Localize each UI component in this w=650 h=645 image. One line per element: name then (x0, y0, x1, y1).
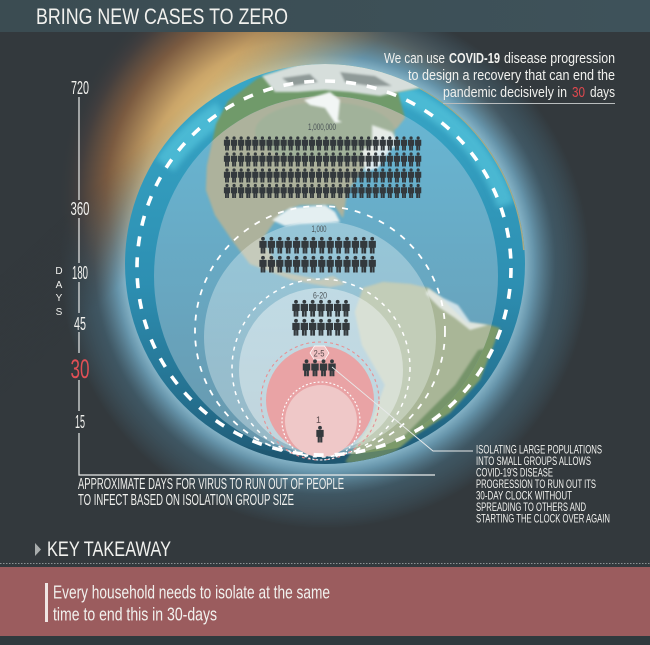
label: 1,000 (312, 224, 326, 234)
2-5 people group (303, 346, 336, 376)
axis tick labels: 360 (70, 199, 90, 219)
dotted outline (282, 382, 360, 460)
clouds north atlantic (362, 125, 400, 172)
axis title days: D (55, 266, 63, 277)
label: 1 (316, 415, 321, 425)
takeaway accent bar (45, 583, 48, 622)
callout text: 30-DAY CLOCK WITHOUT (476, 488, 572, 502)
hudson bay ice (304, 92, 342, 123)
dashed outline (232, 279, 410, 457)
axis title days (55, 266, 63, 318)
axis tick labels: 45 (74, 314, 86, 334)
takeaway band (0, 567, 650, 636)
circle: 6-20 group (232, 279, 410, 457)
intro text block: disease progression (504, 51, 615, 67)
big dashed route around globe (137, 81, 511, 455)
takeaway text: time to end this in 30-days (53, 604, 217, 624)
land tints inside inner circle (205, 96, 492, 454)
blue atmospheric glow (70, 32, 584, 523)
intro underline (443, 103, 615, 104)
axis tick labels: 180 (72, 263, 88, 283)
dotted divider (0, 562, 650, 564)
key takeaway heading: KEY TAKEAWAY (47, 538, 171, 561)
land: southern green edge (404, 348, 484, 436)
land: interior south america (349, 281, 492, 454)
callout text: COVID-19'S DISEASE (476, 466, 553, 480)
earth globe (125, 60, 525, 470)
axis tick labels: 30 (70, 354, 90, 384)
callout text (476, 442, 610, 526)
orange atmospheric glow (58, 0, 538, 435)
inner wash of ocean (154, 96, 498, 456)
bright coastal water (165, 84, 506, 205)
land: south america (344, 324, 501, 463)
land: interior north america (205, 96, 406, 288)
axis caption: APPROXIMATE DAYS FOR VIRUS TO RUN OUT OF PEOPLE (78, 476, 344, 493)
circle: 1 person (282, 382, 360, 460)
land fringe on north-east rim (420, 88, 524, 250)
intro text block: to design a recovery that can end the (408, 68, 615, 84)
hexagon label (310, 346, 329, 360)
intro text block: 30 (572, 85, 585, 101)
y axis and baseline (79, 97, 435, 475)
circle: 2-5 group (261, 342, 379, 460)
globe ocean (125, 64, 525, 464)
intro text block: COVID-19 (449, 51, 500, 67)
solid fill (204, 221, 436, 453)
axis tick labels (70, 78, 90, 432)
1,000,000 people group (224, 122, 421, 198)
dashed outline (195, 206, 445, 456)
header band (0, 0, 650, 32)
solid fill (266, 346, 374, 454)
axis tick labels: 15 (75, 412, 85, 432)
axis title days: S (56, 307, 63, 318)
solid fill (285, 385, 357, 457)
arctic ice (261, 64, 421, 98)
land: great plains green (255, 102, 395, 162)
icon: takeaway arrow (35, 543, 41, 556)
1 person group (316, 415, 324, 443)
circle: 1,000 group (195, 206, 445, 456)
label: 1,000,000 (308, 122, 336, 132)
label: 6-20 (313, 290, 327, 300)
intro text block: pandemic decisively in (443, 85, 567, 101)
intro text block: days (590, 85, 615, 101)
intro text block: We can use (384, 51, 445, 67)
axis tick labels: 720 (71, 78, 89, 98)
callout text: INTO SMALL GROUPS ALLOWS (476, 454, 591, 468)
dashed outline (261, 342, 379, 460)
gulf of mexico clouds (272, 205, 340, 226)
bottom strip (0, 636, 650, 645)
bottom shading (242, 446, 408, 464)
axis caption (78, 476, 344, 509)
ice and clouds (262, 60, 488, 330)
takeaway text: Every household needs to isolate at the same (53, 582, 330, 602)
atlantic coast surf south america (426, 288, 488, 330)
arctic dark patches (282, 72, 392, 86)
callout leader line (332, 367, 473, 451)
label: 2-5 (314, 348, 324, 358)
intro text block (384, 51, 615, 101)
axis title days: Y (56, 293, 63, 304)
title: BRING NEW CASES TO ZERO (36, 4, 288, 29)
takeaway text (53, 582, 330, 624)
1,000 people group (259, 224, 376, 272)
axis title days: A (56, 280, 63, 291)
6-20 people group (292, 290, 350, 336)
axis caption: TO INFECT BASED ON ISOLATION GROUP SIZE (78, 492, 294, 509)
land: north america (210, 64, 420, 142)
solid fill (239, 288, 403, 452)
callout text: SPREADING TO OTHERS AND (476, 500, 586, 514)
